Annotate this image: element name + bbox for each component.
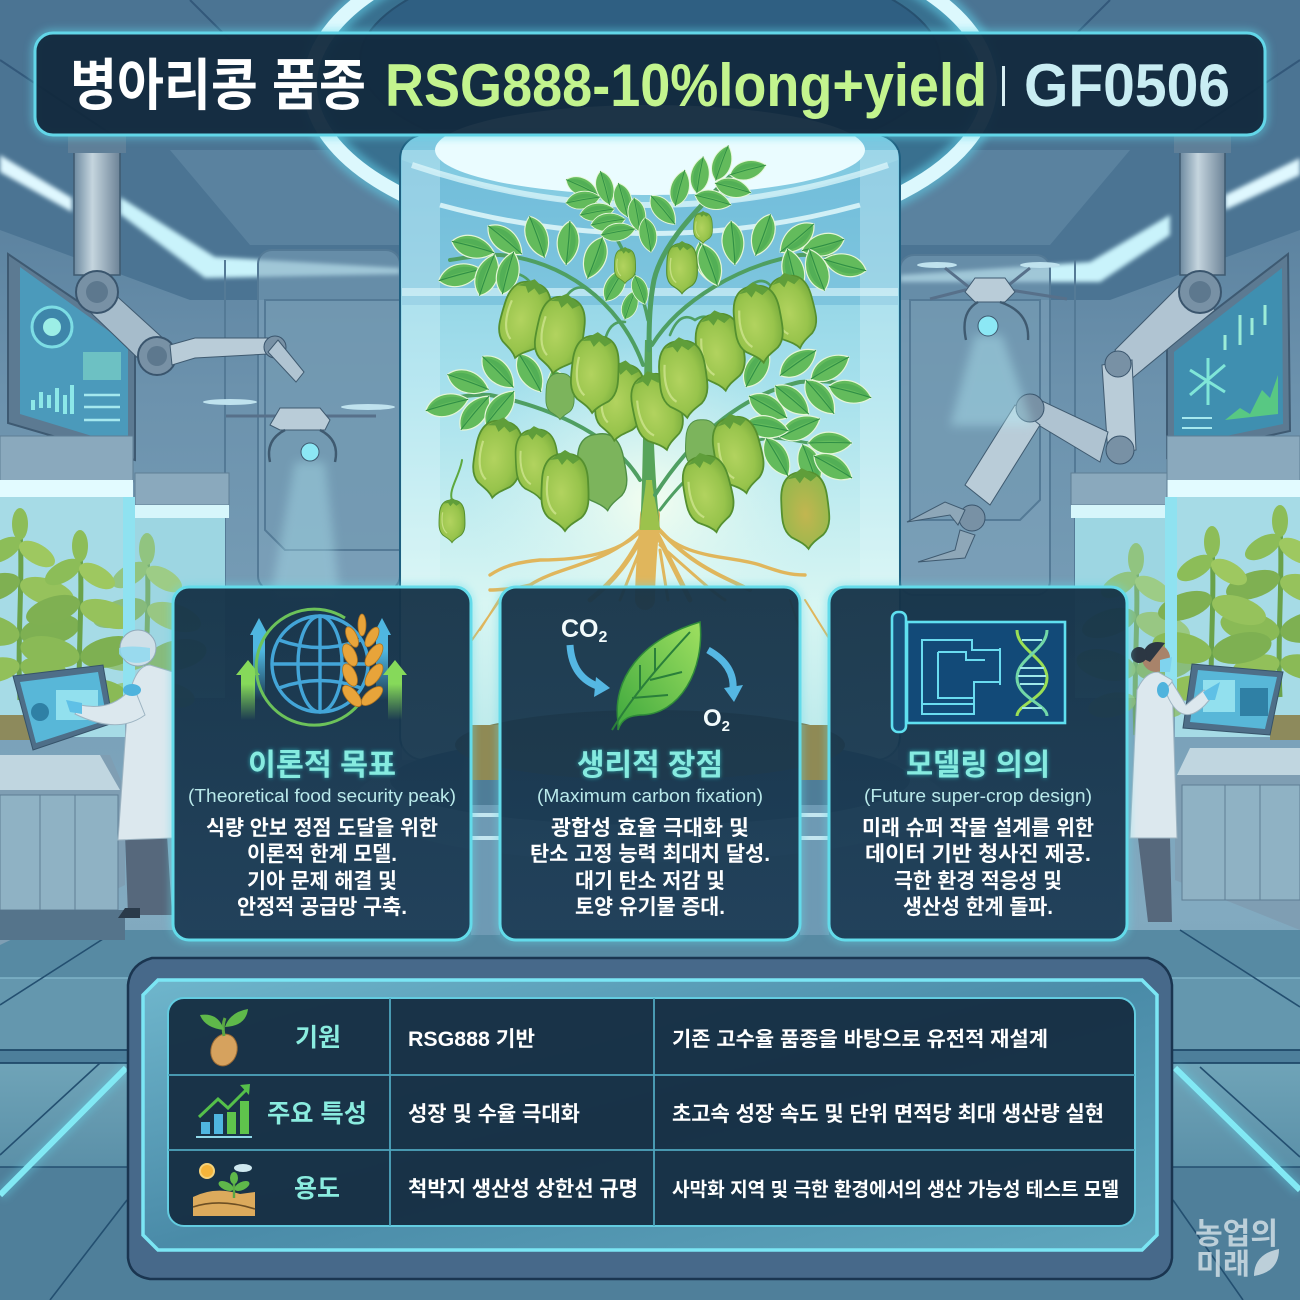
chickpea plant — [423, 142, 874, 640]
left greenhouse cases — [0, 436, 229, 740]
right scientist — [1130, 642, 1220, 922]
description: 생산성 한계 돌파. — [903, 896, 1053, 919]
ceiling — [0, 0, 1300, 300]
right drone with light beam — [917, 262, 1067, 426]
description: 미래 슈퍼 작물 설계를 위한 — [862, 817, 1094, 840]
summary table frame — [128, 958, 1172, 1279]
watermark: 농업의 — [1195, 1218, 1278, 1251]
icon: CO2, leaf, O2 cycle: 2 — [722, 718, 730, 735]
title: code: GF0506 — [1024, 52, 1230, 119]
description: 기존 고수율 품종을 바탕으로 유전적 재설계 — [672, 1028, 1048, 1051]
description: 기아 문제 해결 및 — [247, 870, 397, 893]
panel: modeling significance — [829, 587, 1127, 940]
icon: globe, wheat and growth arrows — [236, 609, 407, 725]
watermark — [1195, 1218, 1279, 1281]
description — [206, 817, 438, 919]
base of the chamber with soil — [355, 710, 945, 935]
row: origin — [200, 1009, 1048, 1069]
icon: CO2, leaf, O2 cycle: 2 — [598, 629, 608, 646]
floor — [0, 930, 1300, 1300]
title: variety name: RSG888-10%long+yield — [385, 52, 987, 119]
stems — [445, 172, 860, 530]
title bar — [35, 33, 1265, 135]
glass cylinder chamber — [400, 105, 900, 760]
left drone with light beam — [203, 399, 395, 600]
icon: CO2, leaf, O2 cycle: O — [703, 705, 722, 732]
row: key traits — [196, 1084, 1104, 1138]
row label: 주요 특성 — [267, 1100, 367, 1128]
icon: sprouting seed — [200, 1009, 248, 1069]
description: 이론적 한계 모델. — [247, 843, 397, 866]
wall panels — [225, 250, 1075, 595]
panel: theoretical goal — [173, 587, 471, 940]
subtitle: (Future super-crop design) — [864, 786, 1092, 806]
title: separator — [1002, 66, 1005, 106]
panel: physiological advantage — [500, 587, 800, 940]
value: RSG888 기반 — [408, 1028, 535, 1051]
description — [862, 817, 1094, 919]
left robotic arm — [68, 135, 304, 382]
row label: 기원 — [295, 1024, 341, 1052]
title: Korean part: 병아리콩 품종 — [70, 54, 366, 117]
subtitle: (Theoretical food security peak) — [188, 786, 456, 806]
description: 극한 환경 적응성 및 — [894, 870, 1062, 893]
row label: 용도 — [294, 1175, 340, 1203]
right wall monitor — [1167, 254, 1290, 458]
description: 광합성 효율 극대화 및 — [551, 817, 749, 840]
summary table — [168, 998, 1135, 1226]
description: 데이터 기반 청사진 제공. — [865, 843, 1091, 866]
right robotic arm with claw — [907, 135, 1231, 562]
value: 척박지 생산성 상한선 규명 — [408, 1178, 638, 1201]
watermark: 미래 — [1196, 1248, 1250, 1281]
description — [530, 817, 770, 919]
description: 대기 탄소 저감 및 — [575, 870, 725, 893]
left wall monitor — [8, 254, 135, 460]
description: 사막화 지역 및 극한 환경에서의 생산 가능성 테스트 모델 — [672, 1179, 1119, 1201]
row: use — [193, 1164, 1119, 1216]
right greenhouse cases — [1071, 436, 1300, 740]
description: 초고속 성장 속도 및 단위 면적당 최대 생산량 실현 — [672, 1103, 1104, 1126]
icon: sun, cloud and soil — [193, 1164, 255, 1216]
icon: CO2, leaf, O2 cycle: CO — [561, 615, 598, 643]
description: 탄소 고정 능력 최대치 달성. — [530, 843, 770, 866]
left console with screen — [0, 665, 125, 945]
heading: 이론적 목표 — [248, 749, 396, 782]
description: 안정적 공급망 구축. — [237, 896, 407, 919]
heading: 생리적 장점 — [577, 749, 723, 782]
ceiling ring light — [310, 0, 990, 245]
description: 식량 안보 정점 도달을 위한 — [206, 817, 438, 840]
roots — [472, 515, 830, 640]
left scientist — [66, 630, 173, 918]
icon: rising bar chart — [196, 1084, 252, 1138]
heading: 모델링 의의 — [906, 749, 1050, 782]
leaves — [423, 142, 874, 489]
right console with screen — [1175, 664, 1300, 930]
ceiling light strips — [0, 155, 1300, 282]
icon: blueprint with DNA helix — [892, 612, 1065, 732]
icon: CO2, leaf, O2 cycle — [561, 615, 743, 735]
value: 성장 및 수율 극대화 — [408, 1103, 580, 1126]
subtitle: (Maximum carbon fixation) — [537, 786, 763, 806]
pods — [439, 211, 832, 551]
description: 토양 유기물 증대. — [575, 896, 725, 919]
